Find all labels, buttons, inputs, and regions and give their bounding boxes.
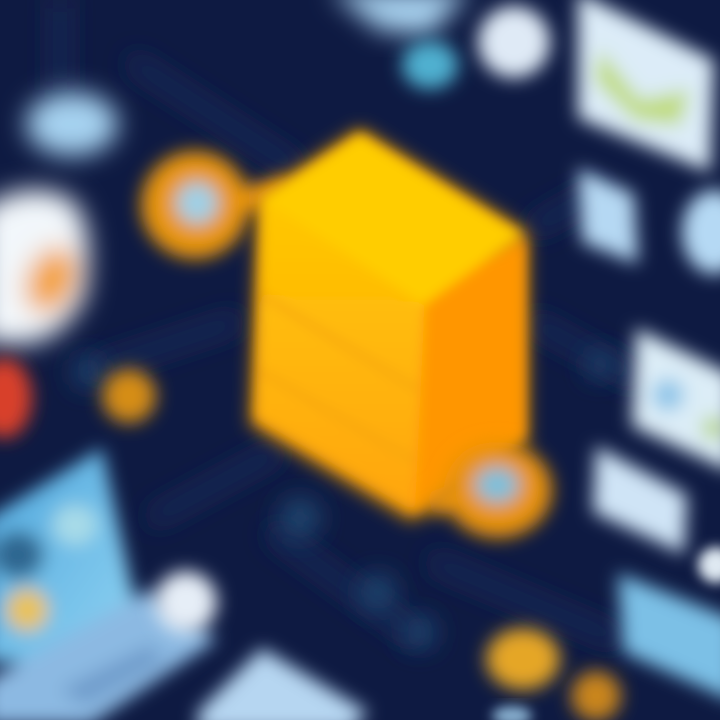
gold dot [6, 589, 48, 631]
block left face [256, 195, 425, 512]
block ridge lines [258, 295, 418, 462]
top centre device [330, 0, 470, 35]
right edge circle [682, 190, 720, 274]
top left cloud [26, 92, 118, 156]
bottom right blue panel [618, 573, 720, 702]
right lower panel [593, 446, 687, 554]
glow edge [250, 128, 528, 522]
red node left [0, 358, 32, 438]
screen detail [0, 531, 44, 579]
right card with icons [632, 328, 720, 472]
small gold node left [102, 369, 156, 423]
right small panel [578, 168, 638, 264]
background connector lines [60, 0, 640, 640]
ring: lower right connector [430, 442, 552, 538]
small gold node bottom [571, 671, 621, 720]
node dots bottom centre [73, 352, 613, 648]
top right panel with green chart [578, 0, 714, 172]
gold node bottom [486, 628, 560, 690]
white dot by laptop [155, 571, 217, 633]
top white circle [478, 6, 550, 78]
small pale node bottom [492, 706, 532, 720]
laptop bottom left [0, 448, 217, 720]
right edge white dot [698, 547, 720, 583]
bottom centre device [198, 648, 368, 720]
laptop screen [0, 448, 137, 662]
left white cloud with orange badge [0, 190, 89, 344]
block right face [415, 240, 524, 510]
central isometric block [250, 128, 528, 522]
block top face [262, 134, 522, 305]
laptop base [0, 590, 217, 720]
top teal dot [402, 41, 458, 89]
ring: upper left connector [141, 151, 290, 259]
